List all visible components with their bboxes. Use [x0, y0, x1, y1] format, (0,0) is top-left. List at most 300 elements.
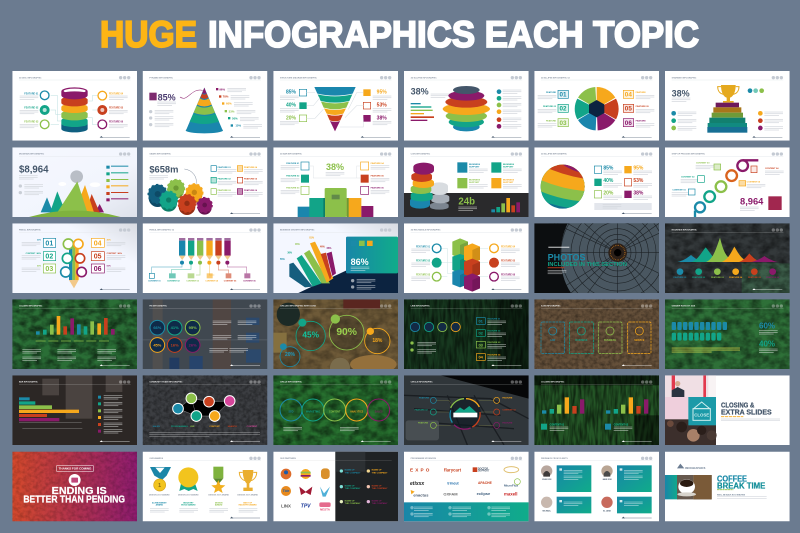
3D block bars [298, 188, 373, 217]
overlapping rings: CONTENT [329, 412, 341, 414]
icon features: SUPPORT [503, 166, 514, 168]
navy wedge [298, 271, 398, 293]
coffee photo [665, 475, 712, 499]
stat $658m: $658m [149, 165, 178, 175]
labelled icons [673, 268, 780, 279]
icon [69, 474, 81, 486]
horizontal bars [411, 103, 434, 121]
heading: COFFEE [717, 475, 748, 484]
outlined cards: SERVICE [634, 340, 645, 342]
outlined cards: BUSINESS [575, 340, 588, 342]
arrow [180, 90, 203, 98]
percent features right: 53% [633, 178, 644, 184]
slide: charts on grass [534, 375, 659, 445]
right features: FEATURE 04 [501, 245, 516, 248]
percentage list: 78% [223, 95, 229, 99]
labelled icons: FEATURE 02 [692, 276, 706, 279]
dark panel list: NAME OF [345, 499, 355, 502]
slide: column infographic on leaves [12, 299, 137, 369]
90% circle: 90% [336, 327, 357, 338]
striped ball [540, 164, 585, 209]
content labels: CONTENT 04 [205, 280, 219, 283]
bar labels: 66% [327, 248, 332, 250]
slide: cylinder blocks infographic: 3D BAR INFOGRAPHIC [280, 153, 303, 156]
side labels: FEATURE [502, 397, 513, 400]
dots and connectors [152, 261, 247, 275]
icon features: BUSINESS [469, 164, 481, 166]
heading: ENDING IS [52, 486, 107, 497]
notes [22, 349, 116, 361]
slide: circles on leaves [273, 375, 398, 445]
slide: charts on grass: COLUMN INFOGRAPHIC [541, 381, 565, 384]
ring row [410, 322, 460, 332]
donut gauges: 95% [189, 325, 197, 330]
slide: pencil infographic 02: PENCIL INFOGRAPHIC 02 [149, 229, 175, 232]
outlined cards: BUSINESS [604, 340, 616, 342]
stepped pyramid [707, 103, 747, 133]
connected avatars [173, 393, 235, 421]
content labels [148, 273, 256, 283]
arrow [184, 169, 196, 184]
slide: circle infographic on laptop: CIRCLE INFOGRAPHIC [411, 381, 433, 384]
left numbered boxes: 02 [559, 106, 567, 113]
number boxes left: 50% [37, 265, 41, 267]
heading: EXTRA SLIDES [721, 408, 772, 417]
slide: gender ratio on leaves [665, 299, 790, 369]
cubes [452, 238, 480, 292]
gold medal with green ribbon [178, 467, 198, 491]
top badges [748, 88, 764, 93]
names: EL JANE [603, 509, 612, 512]
labelled icons: FEATURE 01 [673, 276, 687, 279]
award captions [149, 493, 259, 512]
percent features left: 20% [603, 190, 614, 196]
sponsor logos: SUPPORT [478, 471, 490, 473]
percent features left: 85% [603, 165, 614, 171]
slide: icons on fur texture: ICON INFOGRAPHIC [541, 305, 561, 308]
percent features right: 95% [633, 165, 644, 171]
number boxes left: CONTENT / 40% [26, 252, 41, 255]
dark panel list: THE COMPANY [345, 502, 361, 505]
side labels: FEATURE [419, 397, 430, 400]
legend [671, 111, 783, 130]
left features: FEATURE 01 [24, 92, 39, 95]
slide: pyramid trophy infographic: STAIRWAY INFOGRAPHIC [672, 76, 697, 79]
donut gauges: 16% [171, 342, 179, 347]
left features: FEATURE 03 [286, 187, 300, 190]
content labels: CONTENT 02 [167, 281, 180, 283]
dark panel list: NAME OF [345, 484, 355, 487]
slide: mountain infographic [12, 147, 137, 217]
left stats: 40% [286, 102, 297, 108]
left features: FEATURE 02 [24, 107, 39, 110]
slide: circles on leaves: CIRCLE INFOGRAPHIC [280, 381, 303, 384]
overlapping rings: MARKETING [306, 411, 320, 414]
icon features: SUPPORT [503, 182, 514, 184]
percentage list: 96% [219, 87, 225, 91]
right features [97, 91, 128, 129]
sponsor logos: eclipse [477, 491, 491, 496]
percent features left [594, 165, 622, 200]
slide: pencil infographic [12, 223, 137, 293]
slide: pyramid infographic [142, 71, 268, 141]
labelled icons: FEATURE 03 [711, 276, 725, 279]
dark panel list: NAME OF [372, 484, 382, 487]
slide: our partners: OUR PARTNERS [280, 457, 297, 460]
funnel [314, 87, 356, 131]
dark panel list: THE COMPANY [372, 502, 388, 505]
bar chart [491, 198, 520, 212]
team labels: SALES [153, 425, 160, 428]
icon features: BUSINESS [503, 180, 515, 182]
labelled icons: FEATURE 06 [766, 276, 780, 279]
right features: FEATURE 05 [371, 175, 384, 178]
right stats: 53% [377, 102, 387, 108]
right features: FEATURE 04 [371, 162, 384, 165]
bar labels: 81% [309, 238, 315, 240]
slide: 3D ball infographic: 3D ELLIPSE INFOGRAPHIC [541, 153, 568, 156]
green ribbon star [211, 467, 225, 493]
bar labels [280, 238, 332, 261]
left numbered boxes [538, 90, 568, 127]
mountains with sun [29, 170, 121, 217]
left features: FEATURE 02 [416, 259, 431, 262]
award captions: BEST OF [243, 502, 253, 504]
stat 38%: 38% [411, 87, 429, 97]
award captions: AWARD [215, 504, 223, 507]
thanks badge: THANKS FOR COMING [59, 467, 92, 471]
slide: our partners [273, 452, 398, 522]
numbered list: FEATURE 02 [487, 329, 501, 332]
section heading [548, 247, 627, 274]
left features: FEATURE 03 [24, 121, 39, 124]
number boxes right: 40% [107, 239, 111, 242]
side labels: FEATURE [418, 422, 429, 425]
notes [283, 427, 359, 431]
stat 24b: 24b [458, 197, 475, 208]
award captions: DESIGN 2017 AWARD [149, 493, 170, 496]
layered sphere [443, 86, 490, 131]
numbered list: 01 [478, 319, 484, 324]
slide: gender ratio on leaves: GENDER RATIO BY 2018 [672, 305, 696, 308]
right features: FEATURE 06 [109, 121, 124, 124]
slide: business growth infographic: BUSINESS GROWTH INFOGRAPHIC [280, 229, 315, 232]
team labels: USE [190, 426, 195, 428]
stats [759, 321, 778, 353]
features: FEATURE 05 [244, 178, 258, 181]
slide: bar infographic on building: BAR INFOGRAPHIC [19, 381, 38, 384]
dark panel list: NAME OF [372, 469, 382, 472]
slide: 3D cube infographic: 3D RECTANGLE INFOGRAPHIC [411, 229, 441, 232]
trophy [718, 85, 739, 103]
teal panel: 86% [351, 257, 369, 267]
right stats [363, 89, 391, 125]
slide: icons on fur texture [534, 299, 659, 369]
section heading: PHOTOS [548, 253, 586, 263]
dark panel list: THE COMPANY [345, 487, 361, 490]
dark panel list: THE COMPANY [372, 471, 388, 474]
sponsor logos: APACHE [478, 481, 493, 485]
heading: BREAK TIME [717, 481, 766, 490]
slide: 3D sphere discs infographic [404, 71, 529, 141]
features [211, 166, 263, 196]
labelled icons: FEATURE 04 [729, 276, 743, 279]
badge [768, 196, 782, 210]
donut gauges [150, 320, 200, 352]
number boxes left: 02 [45, 254, 53, 261]
legend [106, 166, 128, 201]
sponsor logos: DOCTOR [478, 468, 488, 470]
icon features: BUSINESS [503, 164, 515, 166]
left numbered boxes: FEATURE [546, 119, 557, 122]
number boxes left [22, 238, 56, 273]
percent features right: 38% [633, 190, 644, 196]
overlapping rings: SALES [375, 411, 383, 414]
slide: 3D disc infographic: 3D DISC INFOGRAPHIC [19, 76, 42, 79]
left bar chart [542, 397, 584, 414]
text notes [209, 321, 256, 352]
peaks [677, 238, 778, 262]
contact labels: CONTENT 03 [696, 162, 710, 164]
left stats [280, 89, 307, 125]
right features [361, 162, 389, 194]
connectors [307, 93, 363, 127]
dark band [404, 193, 529, 217]
left features: FEATURE 03 [416, 273, 431, 276]
slide: coin stacks infographic [404, 147, 529, 217]
numbered list: 02 [478, 331, 484, 336]
percentage list [216, 87, 262, 128]
slide: business growth infographic [273, 223, 398, 293]
sponsor logos: EXPO [410, 468, 430, 473]
logos grid: LINX [281, 504, 291, 509]
people rows [672, 322, 727, 341]
number boxes right: CONTENT / 40% [107, 252, 122, 255]
numbered list: FEATURE 03 [487, 341, 501, 344]
team labels: SEARCH [228, 425, 237, 428]
icon features: SUPPORT [469, 182, 480, 184]
central ring [449, 397, 481, 429]
numbered list [476, 317, 506, 361]
glass dome photo [534, 178, 693, 328]
slide: programme sponsors [404, 452, 529, 522]
numbered list: FEATURE 04 [487, 353, 501, 356]
content labels: CONTENT 03 [186, 281, 200, 283]
left features: FEATURE 02 [286, 175, 300, 178]
slide: our awards: OUR AWARDS [149, 457, 164, 460]
slide: coffee break time [665, 452, 790, 522]
slide: column infographic on leaves: COLUMN INFOGRAPHIC [19, 305, 43, 308]
slide: hexagon wheel infographic: 3D ELLIPSE INFOGRAPHIC 02 [541, 76, 571, 79]
sponsor logos: enactus [413, 493, 429, 498]
award captions: WOOD AWARD [181, 504, 196, 507]
title: INFOGRAPHICS EACH TOPIC [208, 14, 699, 55]
stat 8,964: 8,964 [740, 197, 764, 207]
features: FEATURE 03 [218, 189, 231, 192]
logos grid: TPV [301, 504, 311, 510]
slide: pie circles on building [142, 299, 268, 369]
right stats: 95% [377, 90, 387, 96]
left stats: 20% [286, 115, 297, 121]
slide: circles on food photo [273, 299, 398, 369]
features: FEATURE 06 [244, 189, 258, 192]
award captions: INDUSTRY [183, 502, 194, 504]
side labels: FEATURE [502, 422, 513, 425]
labelled icons: FEATURE 05 [748, 276, 762, 279]
45% circle: 45% [302, 329, 320, 339]
slide: gears infographic: GEARS INFOGRAPHIC [149, 153, 172, 156]
bar labels: 36% [287, 252, 293, 254]
icon features [457, 162, 522, 188]
connectors [51, 95, 97, 124]
photo panel: CLOSE [694, 413, 709, 418]
contact labels: CONTENT 01 [672, 190, 687, 192]
dark panel list: NAME OF [372, 499, 382, 502]
slide: photos section divider [534, 223, 659, 293]
title: HUGE [100, 14, 197, 55]
donut gauges: 45% [153, 342, 162, 347]
slide: line infographic on grass [404, 299, 529, 369]
dark panel list [340, 469, 388, 505]
left features: FEATURE 01 [286, 162, 300, 165]
legend [36, 340, 109, 342]
avatars [541, 465, 613, 508]
captions: CONTENT 02 [614, 424, 629, 426]
left numbered boxes: 03 [559, 120, 567, 127]
slide: line infographic on grass: LINE INFOGRAPHIC [411, 305, 430, 308]
number boxes left: 03 [45, 266, 53, 273]
slide: cylinder blocks infographic [273, 147, 398, 217]
slide: 3D sphere discs infographic: 3D ELLIPSE INFOGRAPHIC [411, 76, 437, 79]
number boxes left: 30% [37, 240, 41, 242]
slide: closing and extra slides [665, 375, 790, 445]
content labels: CONTENT 05 [224, 281, 237, 283]
team labels: CONTENT [247, 426, 258, 428]
team labels [149, 425, 260, 437]
right numbered boxes: FEATURE [636, 91, 646, 94]
award captions: DESIGN 2017 AWARD [237, 493, 259, 496]
slide: circle infographic on laptop [404, 375, 529, 445]
right numbered boxes: 05 [625, 106, 632, 113]
gears [148, 180, 212, 215]
names: MICHAEL [542, 509, 552, 512]
heading: WE'LL BE BACK IN 10 MINUTES [717, 493, 746, 496]
20% circle: 20% [285, 352, 296, 358]
icon features: SUPPORT [469, 166, 480, 168]
percentage list: 50% [232, 116, 238, 120]
sponsor logos: maxell [504, 491, 517, 496]
slide: pyramid trophy infographic [665, 71, 790, 141]
overlapping rings [280, 399, 390, 421]
quote cards [557, 465, 652, 513]
award captions: INDUSTRY AWARD [239, 504, 257, 507]
left numbered boxes: FEATURE [546, 91, 557, 94]
icon features: BUSINESS [469, 180, 481, 182]
slide: community team infographic: COMMUNITY TEAM INFOGRAPHIC [149, 381, 183, 384]
slide: pencil infographic 02 [142, 223, 268, 293]
percentage list: 33% [229, 109, 235, 113]
right features: FEATURE 06 [371, 187, 384, 190]
dark panel list: NAME OF [345, 469, 355, 472]
bar chart [36, 316, 115, 335]
slide: gears infographic [142, 147, 268, 217]
connector [309, 166, 361, 178]
logos grid: Tide [283, 489, 290, 493]
stat 38%: 38% [672, 88, 690, 98]
right features: FEATURE 05 [109, 107, 124, 110]
notes [410, 341, 436, 353]
outlined cards: LAW [550, 339, 556, 342]
sponsor logos: OXFAM [443, 492, 458, 497]
logos grid [281, 468, 331, 511]
team labels: CONTENT [209, 426, 220, 428]
legend dots [497, 89, 521, 129]
slide: feedback from clients [534, 452, 659, 522]
right features: FEATURE 06 [501, 273, 516, 276]
slide: hexagon wheel infographic [534, 71, 659, 141]
heading: CLOSING & [721, 401, 755, 410]
contact labels: CONTENT 02 [681, 176, 695, 178]
disc stack [61, 87, 88, 132]
right numbered boxes: 06 [625, 120, 632, 127]
features: FEATURE 04 [244, 166, 258, 169]
content labels: CONTENT 01 [148, 281, 161, 283]
ring chain [695, 160, 758, 217]
dark panel list: THE COMPANY [345, 471, 361, 474]
right features: FEATURE 04 [109, 92, 124, 95]
section heading: INCLUDED IN THIS SECTION [548, 262, 627, 268]
award captions: AWARD [156, 504, 164, 507]
percentage list: 60% [226, 102, 232, 106]
percent features right [624, 165, 652, 200]
logo: INFOGRAPHICS [685, 466, 706, 470]
wheel [575, 87, 619, 130]
bar labels: 56% [280, 259, 286, 261]
right numbered boxes [623, 90, 654, 127]
features: FEATURE 01 [218, 166, 231, 169]
stats: 40% [759, 340, 775, 349]
stat 85%: 85% [158, 92, 176, 102]
slide: programme sponsors: PROGRAMME SPONSORS [411, 457, 437, 460]
pencils [179, 238, 231, 260]
left features [411, 244, 442, 281]
slide: 3D ball infographic [534, 147, 659, 217]
numbered list: FEATURE 01 [487, 317, 501, 320]
right numbered boxes: FEATURE [636, 119, 646, 122]
donut gauges: 26% [189, 342, 197, 347]
left features [20, 91, 50, 129]
heading [23, 486, 125, 506]
right features [489, 244, 520, 281]
left features: FEATURE 01 [416, 245, 431, 248]
bar labels: 46% [320, 245, 326, 248]
slide: our awards [142, 452, 268, 522]
overlapping rings: SEO [289, 412, 294, 414]
yellow note [672, 348, 740, 352]
notes [351, 279, 375, 289]
dark panel list: THE COMPANY [372, 487, 388, 490]
contact labels: CONTENT 05 [747, 181, 761, 183]
names: JANE DOE [602, 478, 612, 481]
horizontal bars [19, 397, 82, 429]
slide: mountain infographic dark [665, 223, 790, 293]
left numbered boxes: 01 [559, 92, 567, 99]
trophy [239, 470, 257, 491]
slide: 3D cube infographic [404, 223, 529, 293]
sponsor logos [410, 467, 520, 498]
heading [717, 475, 767, 498]
donut gauges: 41% [171, 325, 179, 330]
